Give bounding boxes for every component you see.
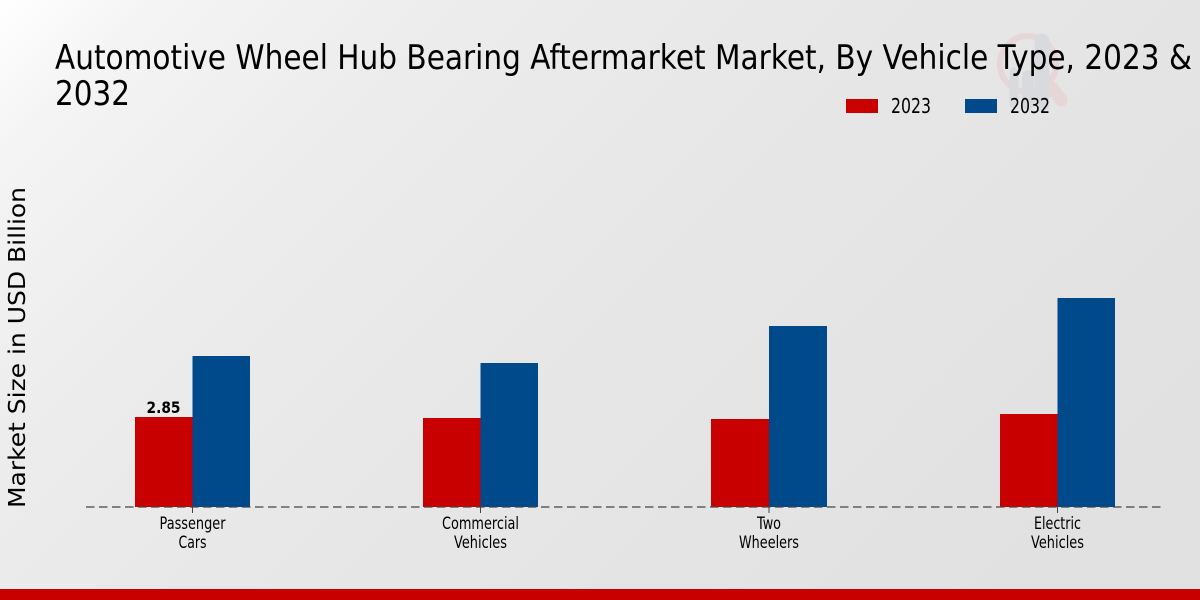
group: Electric Vehicles [1000,298,1115,507]
title [55,38,1192,114]
category labels: Vehicles [1031,533,1084,552]
category labels: Electric [1034,514,1081,533]
group: Commercial Vehicles [423,363,538,507]
category labels: Wheelers [739,533,799,552]
category labels: Two [756,514,781,533]
watermark icon: magnifier with bars [1000,36,1061,104]
category labels [160,514,1084,552]
bar chart [86,298,1164,513]
legend [846,94,1050,118]
legend: 2023 [891,94,931,118]
category labels: Cars [178,533,206,552]
legend: 2032 [1010,94,1050,118]
group: Two Wheelers [711,326,827,507]
category labels: Vehicles [454,533,507,552]
bottom band [0,589,1200,600]
category labels: Commercial [442,514,519,533]
group: Passenger Cars: 2.85 [146,398,180,417]
group: Passenger Cars [135,356,250,507]
y-axis label: Market Size in USD Billion [5,187,31,508]
title: 2032 [55,74,130,114]
category labels: Passenger [160,514,226,533]
